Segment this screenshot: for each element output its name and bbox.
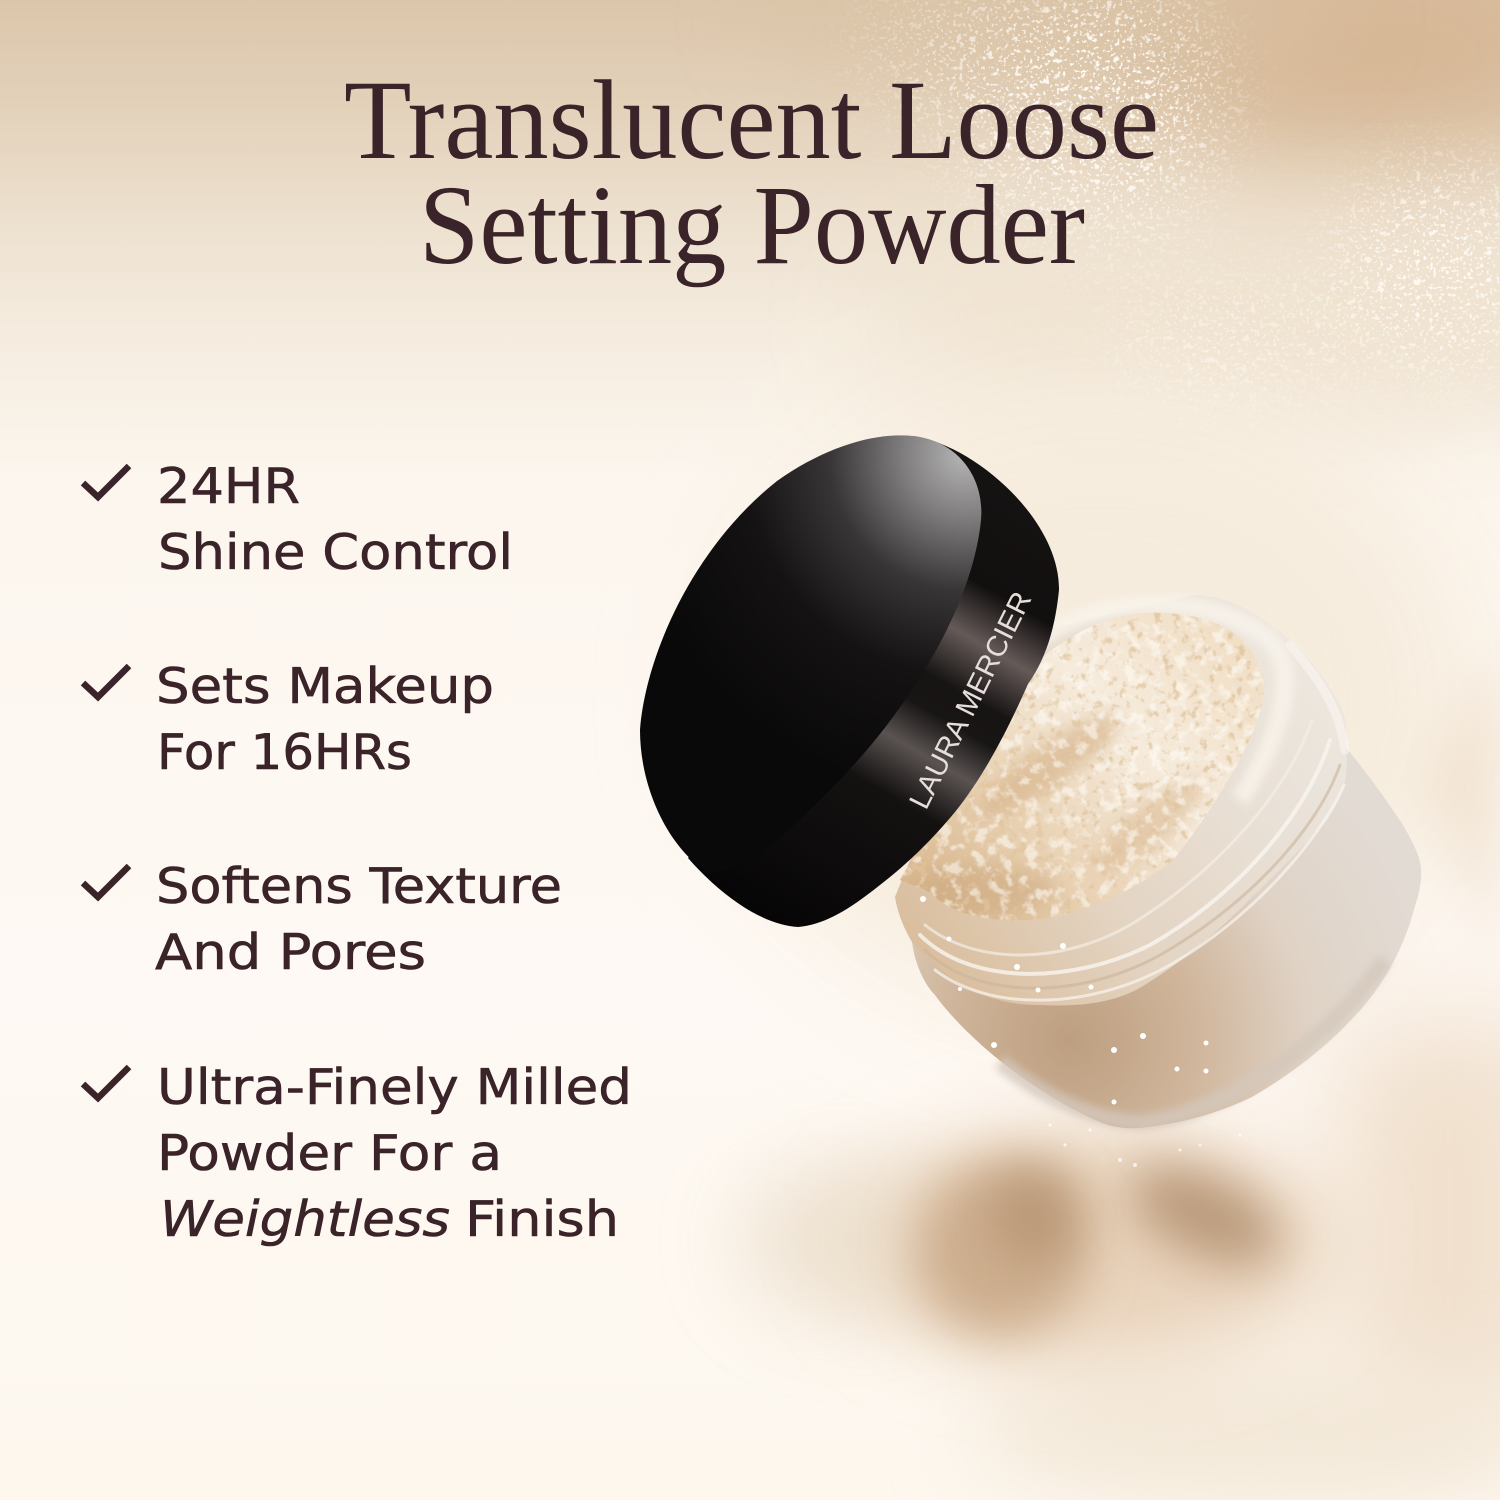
product: black lid xyxy=(640,435,1059,927)
benefit: ultra-finely milled xyxy=(83,1059,632,1248)
powder surface xyxy=(900,613,1264,920)
title xyxy=(344,58,1159,288)
powder texture xyxy=(902,612,1264,920)
title: Translucent Loose xyxy=(344,58,1159,183)
benefit: ultra-finely milled: Ultra-Finely Milled xyxy=(157,1059,632,1116)
jar frosted body xyxy=(895,595,1421,1128)
lid top face xyxy=(640,435,981,873)
benefit: 24HR shine control xyxy=(83,458,513,581)
benefit: ultra-finely milled: Finish xyxy=(465,1191,619,1248)
falling powder specks xyxy=(920,896,1242,1167)
lid side wall xyxy=(688,436,1059,927)
powder halo xyxy=(1040,604,1285,800)
icon: check mark xyxy=(83,866,129,897)
collar threads xyxy=(920,645,1345,1000)
benefit: softens texture: And Pores xyxy=(155,924,426,981)
benefit: softens texture: Softens Texture xyxy=(156,858,562,915)
icon: check mark xyxy=(83,666,129,697)
clear threaded collar xyxy=(895,595,1347,1005)
benefit: sets makeup: Sets Makeup xyxy=(156,658,494,715)
benefit: 24HR shine control: 24HR xyxy=(157,458,300,515)
product: powder jar xyxy=(895,590,1421,1167)
benefit: sets makeup xyxy=(83,658,494,781)
benefit: sets makeup: For 16HRs xyxy=(157,724,412,781)
jar shadow xyxy=(740,1130,1330,1360)
icon: check mark xyxy=(83,1067,129,1098)
benefit: 24HR shine control: Shine Control xyxy=(158,524,513,581)
brand name: LAURA MERCIER xyxy=(904,587,1038,814)
powder cloud speckles xyxy=(844,0,1500,398)
benefit: softens texture xyxy=(83,858,562,981)
benefit: ultra-finely milled: Powder For a xyxy=(157,1125,502,1182)
icon: check mark xyxy=(83,466,129,497)
title: Setting Powder xyxy=(419,163,1085,288)
benefit: ultra-finely milled: Weightless xyxy=(160,1191,450,1248)
jar base edge xyxy=(1000,960,1385,1123)
